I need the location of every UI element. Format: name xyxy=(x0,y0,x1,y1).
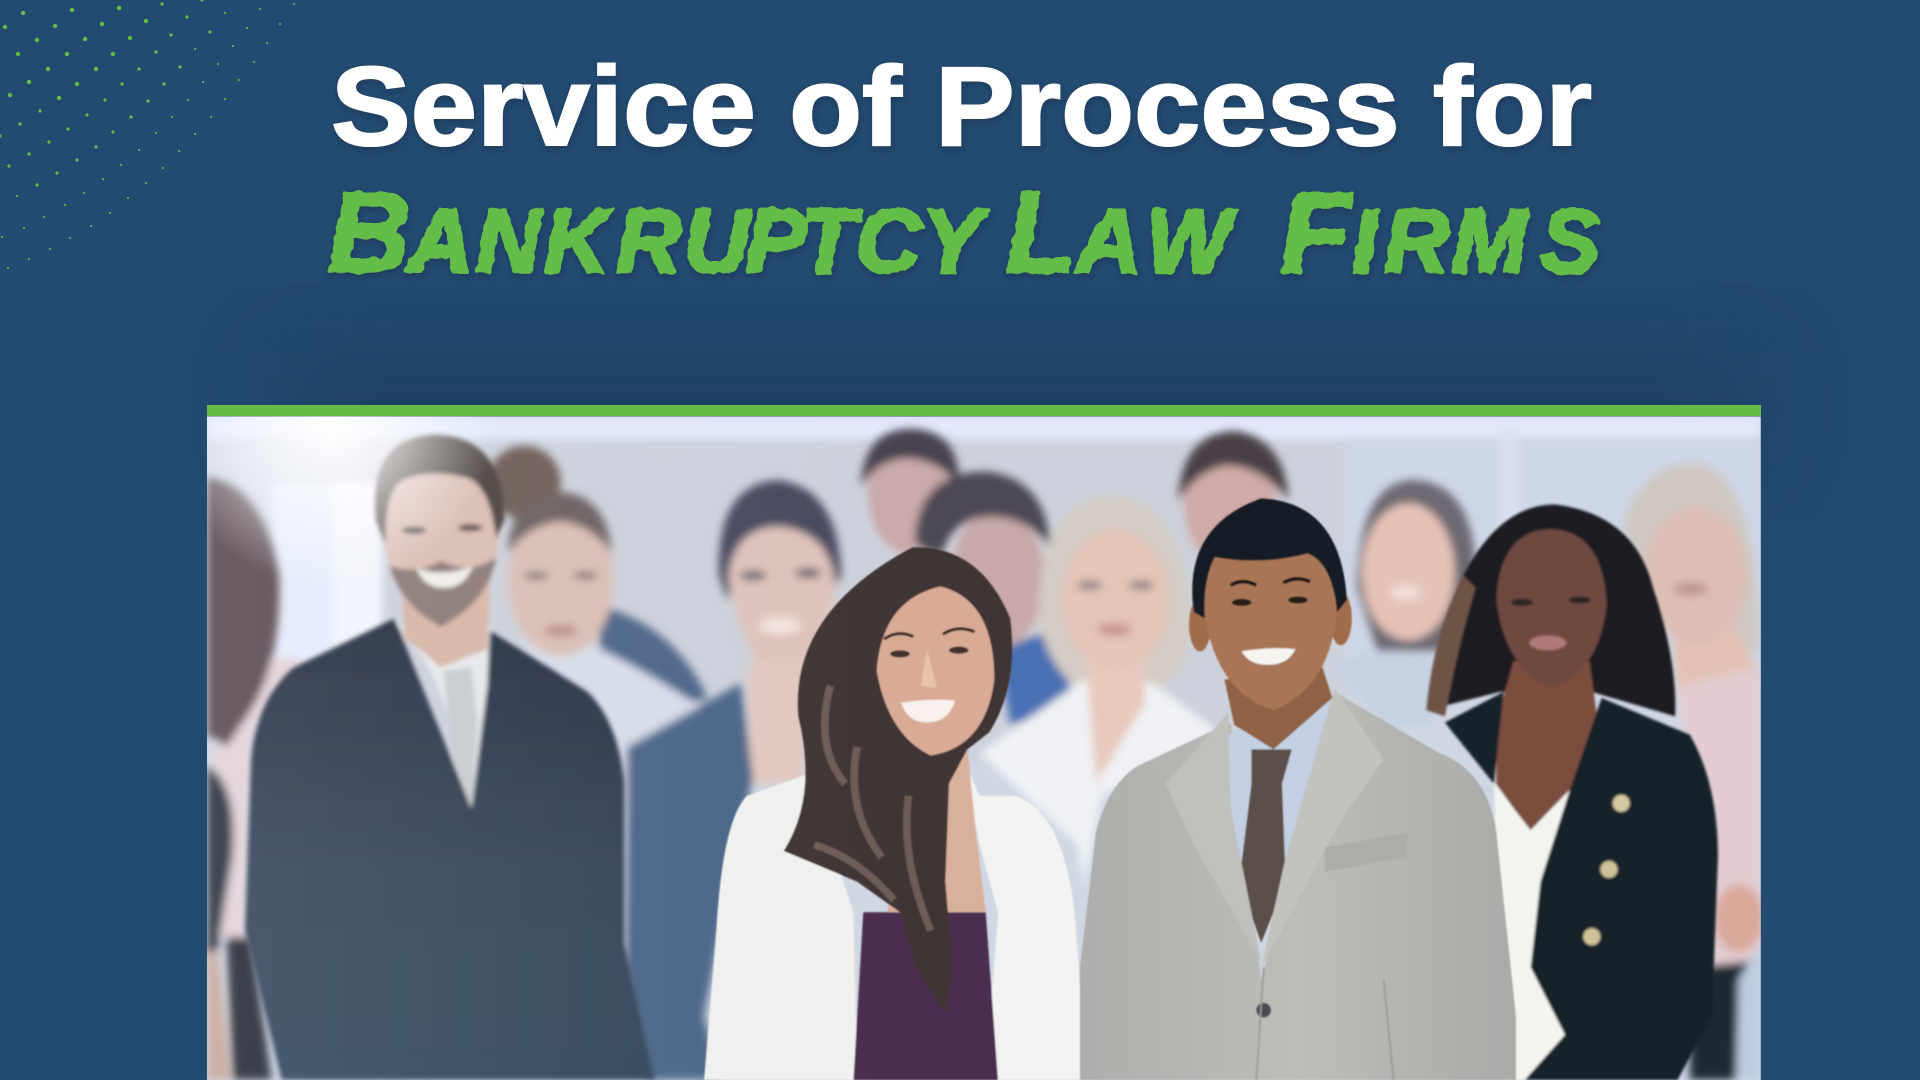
photo: group of business people xyxy=(206,416,1761,1080)
woman in navy blazer xyxy=(624,480,841,1080)
decorative green dot pattern xyxy=(0,0,294,268)
green bar above photo xyxy=(207,405,1761,416)
title line two: IRMS xyxy=(1352,192,1600,292)
back man behind tall man xyxy=(487,446,561,519)
woman in black blazer with gold buttons xyxy=(1427,504,1718,1080)
soft shadow above photo xyxy=(280,350,1760,460)
back man centre-right xyxy=(1178,431,1288,568)
blonde woman far right xyxy=(1622,463,1763,1080)
blond woman in white jacket xyxy=(980,496,1218,888)
title line two: F xyxy=(1280,170,1353,297)
light haze overlay xyxy=(207,416,639,1080)
photo background wall xyxy=(207,416,1761,1080)
title line two: B xyxy=(328,170,410,297)
tall bearded man in dark suit xyxy=(245,435,655,1080)
title line two: AW xyxy=(1074,192,1238,292)
woman in pale blouse xyxy=(1335,480,1476,725)
back man with glasses and blue shirt xyxy=(915,471,1075,725)
left woman xyxy=(207,478,306,1080)
blurred back row of people xyxy=(207,429,1763,1080)
back man centre-left xyxy=(861,429,959,553)
front woman with white blazer xyxy=(704,547,1087,1080)
title line one: Service of Process for xyxy=(331,44,1592,169)
front man in grey suit xyxy=(1080,498,1516,1080)
title line two: L xyxy=(1006,170,1076,297)
man behind, navy jacket and white shirt xyxy=(508,492,708,1004)
title line two: ANKRUPTCY xyxy=(406,192,989,292)
long wavy hair xyxy=(784,547,1012,1014)
face xyxy=(877,587,994,756)
